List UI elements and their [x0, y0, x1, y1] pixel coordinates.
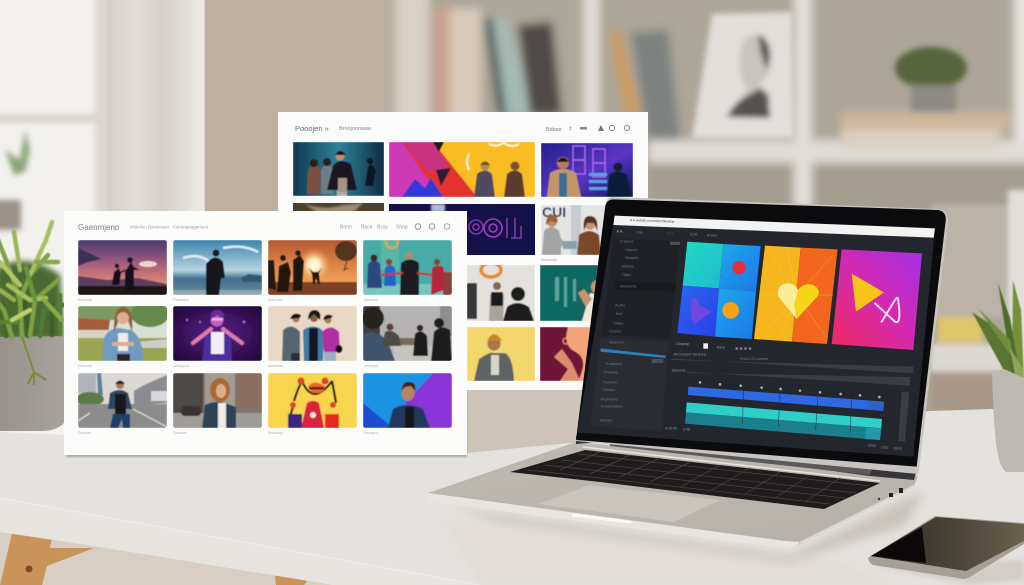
back thumb captions: Bnvosojo: [541, 257, 558, 262]
back gallery card: [278, 112, 648, 390]
back thumb: navy with rings: [389, 204, 535, 255]
toolbar: [617, 228, 718, 238]
captions: Pbosopo: [173, 297, 190, 302]
preview panel 1: [677, 242, 761, 339]
leaves: [0, 222, 64, 338]
captions: Amesiao: [268, 363, 284, 368]
front card header: Shop: [396, 224, 408, 230]
sidebar: Charts: [609, 328, 621, 333]
browser bar: [613, 216, 935, 238]
sidebar: Frames: [620, 238, 634, 243]
sidebar: Elements: [620, 283, 637, 288]
front card header: Bcsy: [377, 224, 388, 230]
bookshelf: [395, 0, 1024, 420]
front card header: Mitteilen Bauwesen: [130, 224, 170, 230]
window with bright light: [0, 0, 111, 450]
toolbar: Edit: [690, 232, 698, 237]
toolbar: □ □: [667, 230, 673, 235]
sidebar: Video: [613, 320, 624, 325]
sidebar: Position: [603, 379, 618, 384]
timeline: Lbcs: [881, 445, 889, 449]
thumb 6: glowing figure on purple: [173, 306, 262, 361]
sidebar: Versions: [608, 339, 624, 344]
front card header: Fotomanagement: [173, 224, 209, 230]
thumb 10: woman in the city: [173, 373, 262, 428]
laptop screen in zoom coordinates: [576, 199, 946, 467]
thumb 1: sunset silhouettes: [78, 240, 167, 295]
phone screen: [871, 517, 1024, 571]
thumb 5: woman in a park: [78, 306, 167, 361]
leaves: [972, 280, 1024, 382]
thumb 8: meeting room: [363, 306, 452, 361]
sidebar: Layout: [625, 247, 638, 252]
timeline: 3:48: [683, 427, 690, 431]
back thumb: dark photo row 2: [293, 203, 384, 211]
card background: [64, 211, 467, 455]
back card header: Broojoonaaw: [339, 126, 371, 132]
back card header: Pooojen »: [295, 124, 329, 133]
timeline: Ebcs: [894, 446, 902, 450]
app background: [577, 216, 935, 457]
timeline: Display: [676, 341, 689, 346]
back thumb: yellow with man: [467, 327, 535, 381]
back thumb: teal night group: [293, 142, 384, 196]
captions: Jhieapo: [364, 363, 379, 368]
captions: Aorooso: [268, 297, 284, 302]
back card header: Bdsoo: [546, 127, 562, 133]
phone body: [868, 516, 1024, 579]
captions: Dsoapo: [364, 430, 379, 435]
timeline: Rack: [717, 345, 725, 349]
trackpad: [539, 485, 720, 522]
timeline: ▣ ▣ ▣ ▣: [735, 347, 752, 351]
curtain: [110, 0, 205, 445]
preview panel 3: [832, 249, 922, 350]
front card header: Bonn: [340, 224, 352, 230]
sidebar: Text: [615, 311, 623, 316]
bezel: [576, 199, 946, 467]
floor and table legs: [0, 525, 480, 585]
laptop lid: [576, 197, 948, 474]
sidebar: Effects: [622, 264, 634, 269]
blurred shelf plant: [895, 47, 967, 111]
thumb 7: three people on cream: [268, 306, 357, 361]
sidebar: Transition: [605, 361, 622, 366]
back thumb: maroon and peach abstract: [540, 327, 590, 381]
wooden leg right: [275, 574, 308, 585]
potted plant right: [972, 280, 1024, 472]
sidebar: Keyframe: [601, 396, 619, 401]
back thumb: purple neon scene: [541, 143, 633, 197]
keyboard: [510, 450, 880, 509]
browser bar: ● ● webdit.com/editor/timeline: [630, 218, 675, 224]
pot: [992, 369, 1024, 472]
timeline: Bras: [868, 444, 876, 448]
back thumb: colourful geometric with figures: [389, 142, 535, 197]
captions: Dorawo: [173, 430, 188, 435]
laptop shadow: [450, 490, 925, 562]
back thumb: light room with orange swirl: [467, 265, 535, 321]
sidebar: Titles: [622, 272, 631, 277]
captions: Jelbsgon: [173, 363, 189, 368]
card shadow: [66, 452, 467, 457]
blurred window plant: [0, 130, 30, 230]
card background: [278, 112, 648, 390]
desk top: [0, 408, 1024, 585]
front card header: [78, 223, 450, 232]
captions: Dhorou: [78, 430, 91, 435]
toolbar: ■ ■: [617, 228, 623, 233]
laptop base: [428, 436, 918, 548]
dark foliage mass: [0, 261, 64, 340]
captions: Bolowin: [78, 297, 92, 302]
sidebar: Motion: [603, 387, 615, 392]
lower-right blurred shelf: [930, 190, 1024, 420]
concrete pot: [0, 336, 66, 431]
wall: [205, 0, 395, 260]
back card header: [295, 124, 630, 133]
hinge bar: [576, 436, 918, 480]
thumb 11: yellow cartoon character: [268, 373, 357, 428]
hanging stem: [22, 337, 46, 385]
wall behind the desk under cards: [467, 380, 597, 460]
front card header: ‡: [114, 226, 117, 232]
timeline: [665, 341, 913, 450]
phone shadow: [870, 560, 1024, 585]
back thumb: teal with person: [540, 265, 598, 321]
timeline: 0:10:00: [665, 426, 677, 430]
phone on desk: [868, 516, 1024, 585]
toolbar: Share: [707, 233, 718, 238]
sidebar: Timeline: [603, 369, 619, 374]
framed portrait: [692, 12, 794, 138]
sidebar: Composition: [601, 404, 623, 409]
sign text: CUI: [542, 204, 566, 220]
front card header: Gaenmjeno: [78, 223, 120, 232]
timeline: All Content Versions: [673, 353, 706, 357]
preview panel 2: [754, 246, 838, 344]
thumb 12: man on blue and purple: [363, 373, 452, 428]
ports: [878, 498, 880, 500]
back thumb: office with CUI sign: [541, 204, 605, 255]
front gallery card: [64, 211, 467, 457]
captions: Dhaoan: [78, 363, 92, 368]
captions: [78, 297, 379, 435]
laptop: [428, 197, 948, 562]
thumb 3: silhouettes at sunrise: [268, 240, 357, 295]
sidebar: [590, 238, 680, 431]
thumb 9: man on a street: [78, 373, 167, 428]
back card header: ‡: [569, 126, 572, 132]
front card header: Back: [361, 224, 373, 230]
thumb 2: man by the sea: [173, 240, 262, 295]
captions: Bosolog: [268, 430, 282, 435]
wooden leg left: [0, 533, 94, 585]
sidebar: Master: [600, 418, 613, 423]
timeline: Elements: [672, 369, 686, 373]
sidebar: Audio: [615, 303, 626, 308]
timeline: Pond 1/3 Content: [740, 357, 768, 361]
thumb 4: group with ribbon: [363, 240, 452, 295]
captions: Gosoan: [364, 297, 378, 302]
sidebar: Shapes: [625, 255, 639, 260]
toolbar: File: [637, 229, 644, 234]
potted plant left: [0, 222, 66, 431]
